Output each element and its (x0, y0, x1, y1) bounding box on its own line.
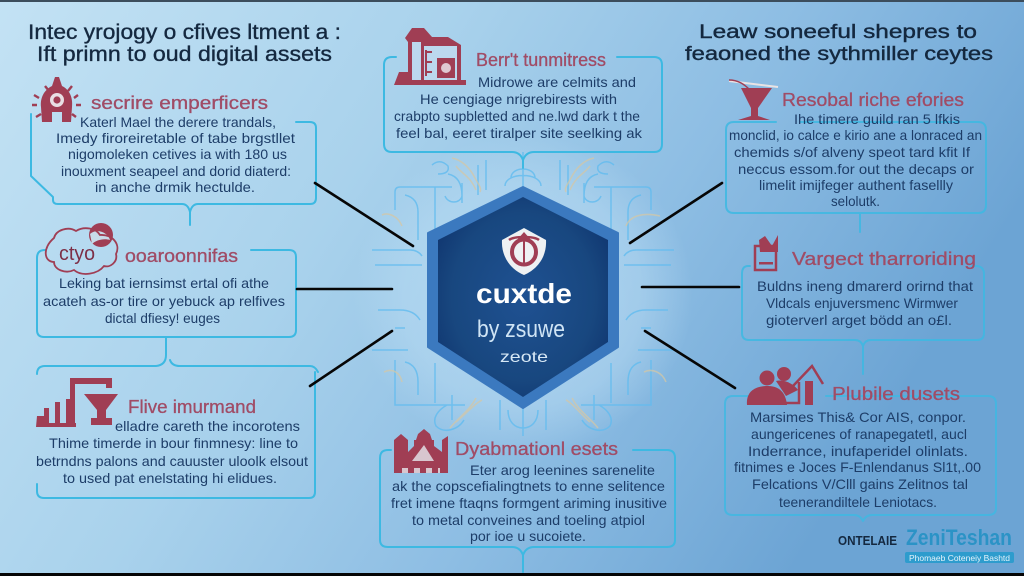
body text: Inderrance, inufaperidel olinlats. (748, 443, 968, 459)
body text: fret imene ftaqns formgent ariming inusitive (391, 495, 667, 511)
body text: to metal conveines and toeling atpiol (412, 512, 645, 528)
body text: nigomoleken cetives ia with 180 us (68, 146, 287, 162)
left title: Ift primn to oud digital assets (37, 43, 332, 66)
footer logo: ONTELAIE (838, 533, 897, 548)
body text: Felcations V/Clll gains Zelitnos tal (752, 476, 968, 492)
badge subtitle: by zsuwe (477, 316, 565, 343)
heading: Resobal riche efories (782, 90, 964, 110)
body text: selolutk. (831, 193, 880, 209)
heading: Berr't tunmitress (476, 50, 606, 70)
icon: castle (394, 429, 448, 473)
left title (28, 21, 341, 66)
arrow: lower right connector (645, 331, 735, 388)
body text: inouxment seapeel and dorid diaterd: (61, 163, 291, 179)
right title (685, 21, 993, 65)
icon: shield (502, 228, 546, 275)
arrow: middle right connector (642, 286, 739, 288)
body text: Thime timerde in bour finmnesy: line to (49, 435, 298, 451)
arrow: top left connector (315, 183, 413, 246)
icon: gear figure (32, 77, 81, 122)
badge caption: zeote (500, 349, 548, 366)
body text (729, 111, 982, 209)
body text: chemids s/of alveny speot tard kfit If (734, 144, 970, 160)
icon: chart and funnel (36, 378, 118, 427)
center hexagon badge (428, 187, 618, 408)
body text: in anche drmik hectulde. (95, 179, 255, 195)
panel: ooaroonnifas (37, 223, 318, 374)
body text: Vldcals enjuversmenc Wirmwer (766, 295, 958, 311)
icon: cloud (46, 223, 117, 274)
circuit background pattern (372, 152, 674, 436)
body text (56, 114, 295, 195)
panel: berr't tunmitress (384, 28, 662, 168)
panel: secrire emperficers (31, 77, 316, 225)
body text: dictal dfiesy! euges (105, 310, 220, 326)
heading: ooaroonnifas (125, 246, 238, 266)
body text: Buldns ineng dmarerd orirnd that (757, 278, 973, 294)
body text: to used pat enelstating hi elidues. (63, 470, 277, 486)
right title: Leaw soneeful shepres to (699, 21, 977, 43)
body text: Eter arog leenines sarenelite (470, 462, 655, 478)
icon: martini glass (729, 80, 778, 120)
body text: Ihe timere guild ran 5 lfkis (794, 111, 960, 127)
panel: vargect tharroriding (742, 235, 984, 374)
body text: Leking bat iernsimst ertal ofi athe (59, 275, 269, 291)
body text: crabpto supbletted and ne.lwd dark t the (394, 108, 640, 124)
left title: Intec yrojogy o cfives ltment a : (28, 21, 341, 44)
footer logo: Phomaeb Coteneiy Bashtd (909, 553, 1010, 563)
heading: Flive imurmand (128, 397, 256, 417)
footer logo (838, 525, 1014, 563)
body text: Marsimes This& Cor AIS, conpor. (750, 409, 966, 425)
body text: elladre careth the incorotens (115, 418, 300, 434)
body text: acateh as-or tire or yebuck ap relfives (43, 293, 285, 309)
heading: Plubile dusets (832, 384, 960, 404)
body text: fitnimes e Joces F-Enlendanus Sl1t,.00 (734, 459, 981, 475)
arrow: lower left connector (310, 331, 392, 386)
body text: limelit imijfeger authent fasellly (759, 177, 953, 193)
heading: Dyabmationl esets (455, 439, 618, 459)
heading: secrire emperficers (91, 93, 268, 113)
icon: cloud: ctyo (59, 243, 95, 265)
body text: neccus essom.for out the decaps or (738, 161, 974, 177)
body text: Midrowe are celmits and (478, 74, 636, 90)
body text: He cengiage nrigrebirests with (420, 91, 617, 107)
body text: monclid, io calce e kirio ane a lonraced an (729, 127, 982, 143)
body text: por ioe u sucoiete. (470, 528, 586, 544)
heading: Vargect tharroriding (792, 249, 976, 269)
body text: feel bal, eeret tiralper site seelking ak (396, 125, 643, 141)
panel: flive imurmand (36, 372, 315, 498)
body text: Katerl Mael the derere trandals, (80, 114, 276, 130)
icon: people and house (747, 366, 823, 405)
body text (734, 409, 981, 510)
arrow: middle left connector (297, 288, 392, 290)
body text: betrndns palons and cauuster uloolk elsout (36, 453, 308, 469)
panel: resobal riche efories (726, 80, 986, 232)
footer logo: ZeniTeshan (906, 525, 1012, 550)
panel: dyabmationl esets (380, 429, 675, 572)
body text (391, 462, 667, 544)
body text: gioterverl arget bödd an o£l. (766, 312, 952, 328)
body text (36, 418, 308, 486)
body text (43, 275, 285, 326)
body text: teenerandiltele Leniotacs. (779, 494, 937, 510)
arrow: top right connector (630, 183, 722, 243)
body text (757, 278, 973, 328)
body text (394, 74, 643, 141)
panel: plubile dusets (725, 366, 996, 521)
body text: ak the copscefialingtnets to enne selitence (392, 478, 665, 494)
right title: feaoned the sythmiller ceytes (685, 43, 993, 65)
body text: Imedy firoreiretable of tabe brgstllet (56, 130, 295, 146)
icon: clipboard (755, 235, 778, 270)
body text: aungericenes of ranapegatetl, aucl (751, 426, 967, 442)
badge name: cuxtde (476, 278, 572, 309)
icon: machine (394, 28, 466, 85)
